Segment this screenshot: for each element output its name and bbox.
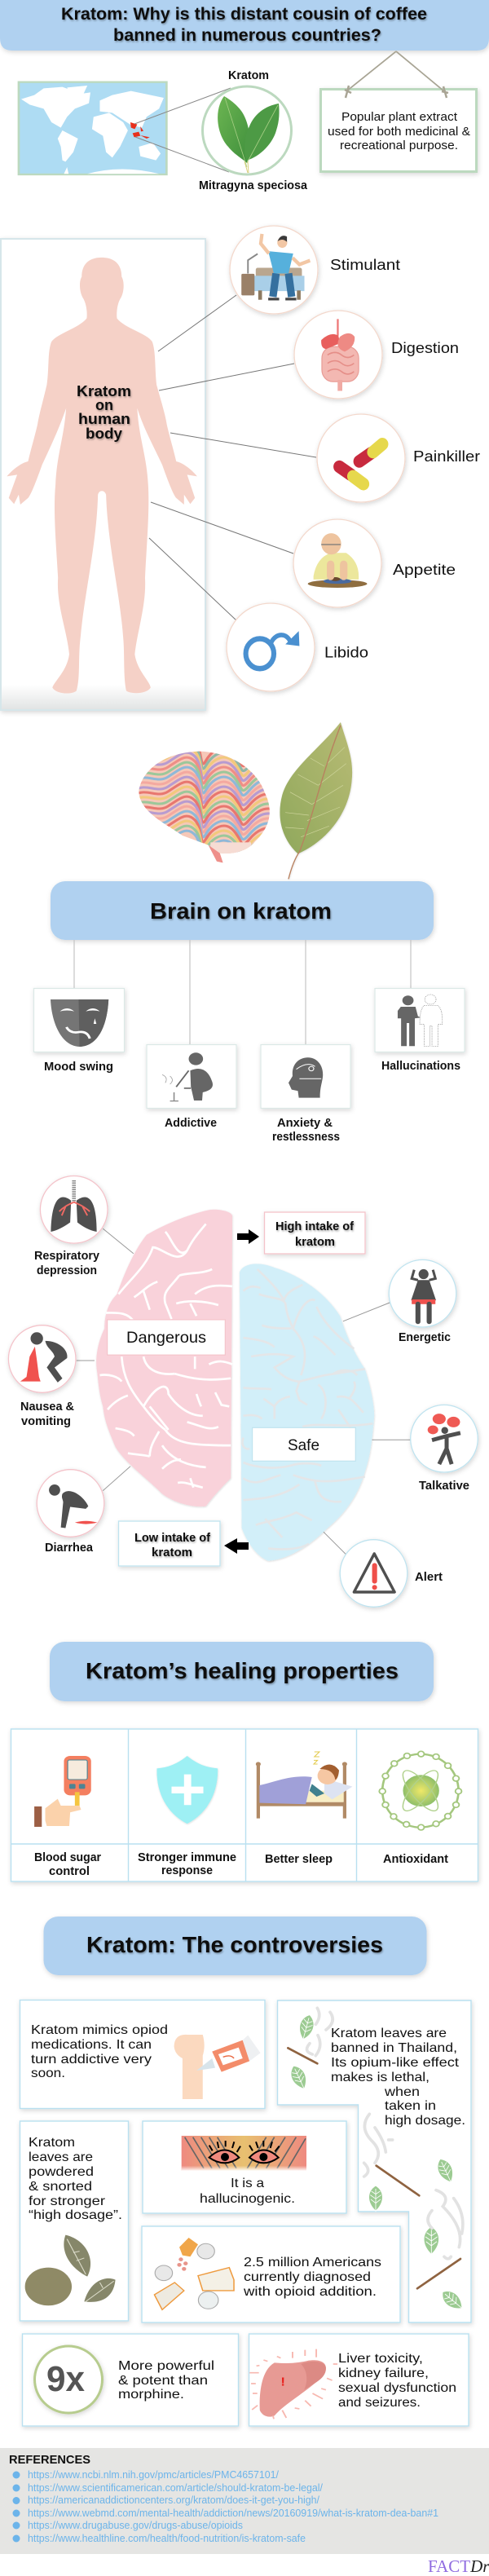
icon: blood sugar meter (34, 1756, 91, 1827)
heading: Brain on kratom (51, 881, 434, 940)
panel: hallucinogenic: hallucinogenic. (200, 2192, 295, 2206)
box: mood swing (34, 988, 124, 1074)
panel: banned in Thailand: banned in Thailand, (331, 2041, 457, 2055)
panel: powdered and snorted: & snorted (29, 2180, 92, 2194)
label: Safe: Safe (288, 1436, 319, 1454)
effect: painkiller (317, 414, 480, 502)
box: addictive (147, 1045, 236, 1130)
panel: references (0, 2448, 489, 2554)
panel: human body (1, 239, 205, 710)
chart: safe brain hemisphere (240, 1264, 374, 1561)
effect: respiratory depression (34, 1176, 108, 1277)
callout: low intake of kratom (119, 1521, 220, 1566)
panel: powdered and snorted (20, 2121, 129, 2321)
effect: appetite: Appetite (393, 562, 456, 578)
effect: respiratory depression: depression (37, 1264, 97, 1277)
panel: powdered and snorted: leaves are (29, 2150, 93, 2164)
panel: powdered and snorted: Kratom (29, 2136, 75, 2150)
chart: dangerous brain hemisphere (96, 1210, 232, 1506)
heading: Kratom's healing properties: Kratom’s healing properties (86, 1658, 399, 1683)
panel: banned in Thailand (277, 2000, 471, 2322)
table captions (34, 1851, 448, 1878)
arrow: to high intake (237, 1229, 259, 1244)
icon: inflamed liver (249, 2349, 337, 2419)
callout: high intake of kratom (264, 1212, 365, 1254)
callout: low intake of kratom: Low intake of (134, 1532, 210, 1545)
panel: opioid addiction statistic: 2.5 million Americans (244, 2256, 381, 2269)
panel: powdered and snorted: “high dosage”. (29, 2208, 122, 2222)
effect: energetic: Energetic (399, 1331, 451, 1344)
panel: banned in Thailand: Kratom leaves are (331, 2027, 447, 2040)
panel: liver toxicity: and seizures. (338, 2396, 421, 2410)
icon: sleeping person in bed (256, 1752, 352, 1819)
table captions: control (49, 1865, 90, 1878)
icon: hallucinating eyes (182, 2136, 306, 2171)
effect: diarrhea: Diarrhea (45, 1542, 94, 1555)
icon: spilled pill bottles (154, 2238, 234, 2309)
panel: 9x more powerful: morphine. (118, 2388, 184, 2402)
panel: mimics opioid medications: Kratom mimics opiod (31, 2023, 168, 2037)
panel: healing properties table (11, 1729, 478, 1881)
icons: leaves, smoke and kratom sticks (288, 2008, 467, 2314)
icon: inflamed liver: ! (280, 2376, 285, 2389)
panel: banned in Thailand: when (384, 2085, 420, 2099)
callout: low intake of kratom: kratom (152, 1546, 192, 1559)
effect: stimulant (230, 226, 400, 314)
panel: opioid addiction statistic: with opioid addition. (243, 2285, 377, 2299)
effect: respiratory depression: Respiratory (34, 1250, 99, 1263)
heading: Kratom: The controversies: Kratom: The controversies (86, 1932, 383, 1957)
panel: banned in Thailand: Its opium-like effect (331, 2056, 460, 2070)
logo: FactDr: FACTDr (428, 2556, 489, 2576)
effect: alert (340, 1540, 443, 1607)
reference links: https://www.scientificamerican.com/article/should-kratom-be-legal/ (28, 2481, 323, 2494)
panel: hanging sign (321, 51, 476, 171)
effect: energetic (389, 1259, 456, 1344)
reference bullets (13, 2472, 20, 2542)
box: hallucinations (375, 988, 465, 1073)
panel: opioid addiction statistic: currently diagnosed (244, 2270, 371, 2284)
effect: digestion: Digestion (391, 340, 459, 356)
reference links: https://www.ncbi.nlm.nih.gov/pmc/articles/PMC4657101/ (28, 2468, 279, 2481)
effect: nausea and vomiting: Nausea & (20, 1400, 75, 1414)
panel: liver toxicity: sexual dysfunction (338, 2381, 456, 2395)
box: anxiety and restlessness (261, 1045, 350, 1144)
icon: immunity shield (156, 1756, 218, 1824)
icon: powder and dried leaves (25, 2235, 116, 2305)
effect: alert: Alert (415, 1571, 443, 1584)
panel: world map (19, 82, 166, 174)
connector lines: body to effects (149, 295, 316, 620)
panel: hanging sign: used for both medicinal & (328, 126, 470, 139)
heading: Kratom's healing properties (50, 1642, 434, 1701)
body text: Kratom (77, 383, 131, 399)
icon: kratom leaves in circle (202, 86, 292, 174)
panel: hallucinogenic: It is a (231, 2177, 264, 2190)
panel: 9x more powerful (23, 2334, 238, 2426)
connector lines: high/low intake effects (77, 1228, 411, 1555)
panel: hallucinogenic (143, 2121, 346, 2213)
reference links: https://www.drugabuse.gov/drugs-abuse/opioids (28, 2519, 243, 2531)
body text: human (78, 411, 130, 427)
label: Dangerous: Dangerous (126, 1329, 206, 1347)
title: Kratom: Why is this distant cousin of coffee (61, 5, 427, 24)
reference links: https://americanaddictioncenters.org/kratom/does-it-get-you-high/ (28, 2494, 319, 2506)
effect: libido (227, 603, 368, 691)
box: anxiety and restlessness: Anxiety & (277, 1117, 333, 1130)
label: Mitragyna speciosa: Mitragyna speciosa (199, 179, 308, 192)
panel: 9x more powerful: & potent than (118, 2374, 208, 2388)
illustration: colourful brain (139, 752, 270, 862)
box: hallucinations: Hallucinations (381, 1060, 460, 1073)
panel: mimics opioid medications: medications. It can (31, 2038, 152, 2052)
illustration: kratom leaf (280, 722, 352, 879)
panel: opioid addiction statistic (142, 2226, 400, 2322)
table captions: response (161, 1864, 213, 1877)
effect: stimulant: Stimulant (330, 257, 400, 273)
panel: liver toxicity: kidney failure, (338, 2366, 429, 2380)
icon: antioxidant atom (379, 1751, 461, 1830)
table captions: Blood sugar (34, 1851, 101, 1864)
panel: liver toxicity (249, 2334, 469, 2426)
effect: digestion (294, 311, 459, 399)
reference links (28, 2468, 438, 2544)
body text: body (86, 426, 122, 442)
table captions: Antioxidant (383, 1853, 448, 1866)
effect: painkiller: Painkiller (413, 448, 480, 465)
panel: banned in Thailand: taken in (385, 2099, 436, 2113)
panel: banned in Thailand: makes is lethal, (331, 2071, 430, 2084)
label box: Dangerous (108, 1320, 225, 1355)
box: addictive: Addictive (165, 1117, 217, 1130)
effect: talkative: Talkative (419, 1480, 469, 1493)
callout: high intake of kratom: kratom (295, 1236, 335, 1249)
panel: powdered and snorted: powdered (29, 2165, 94, 2179)
icon: arm and syringe (174, 2035, 261, 2099)
stat: 9x (34, 2346, 103, 2413)
panel: mimics opioid medications: turn addictive very (31, 2053, 152, 2067)
arrow: to low intake (224, 1538, 249, 1554)
callout lines: map to leaf (134, 88, 231, 172)
box: anxiety and restlessness: restlessness (272, 1131, 340, 1144)
effect: libido: Libido (324, 644, 368, 660)
title: banned in numerous countries? (113, 26, 381, 45)
connector lines: brain effects (74, 940, 411, 1044)
label: Kratom: Kratom (228, 69, 269, 82)
body silhouette (7, 258, 197, 694)
panel: mimics opioid medications (20, 2000, 265, 2108)
callout: high intake of kratom: High intake of (275, 1220, 354, 1233)
heading: Brain on kratom: Brain on kratom (150, 898, 332, 924)
effect: appetite (293, 519, 456, 607)
stat: 9x: 9x (46, 2359, 85, 2399)
panel: banned in Thailand: high dosage. (385, 2114, 465, 2128)
reference links: https://www.webmd.com/mental-health/addiction/news/20160919/what-is-kratom-dea-ban#1 (28, 2507, 438, 2519)
table captions: Better sleep (265, 1853, 333, 1866)
effect: nausea and vomiting: vomiting (21, 1415, 71, 1428)
panel: hanging sign: recreational purpose. (340, 139, 458, 152)
title (0, 0, 489, 51)
heading: Kratom: The controversies (44, 1917, 427, 1975)
effect: talkative (411, 1405, 478, 1493)
panel: 9x more powerful: More powerful (118, 2359, 214, 2373)
panel: liver toxicity: Liver toxicity, (338, 2352, 423, 2366)
body text (77, 383, 131, 442)
box: mood swing: Mood swing (44, 1061, 113, 1074)
panel: hanging sign: Popular plant extract (341, 111, 457, 124)
panel: mimics opioid medications: soon. (31, 2067, 65, 2080)
panel: powdered and snorted: for stronger (29, 2194, 106, 2208)
table captions: Stronger immune (138, 1851, 236, 1864)
reference links: https://www.healthline.com/health/food-nutrition/is-kratom-safe (28, 2532, 306, 2544)
effect: nausea and vomiting (8, 1325, 76, 1428)
effect: diarrhea (37, 1470, 104, 1555)
panel: references: REFERENCES (9, 2453, 90, 2467)
body text: on (95, 397, 113, 413)
label box: Safe (253, 1427, 355, 1461)
